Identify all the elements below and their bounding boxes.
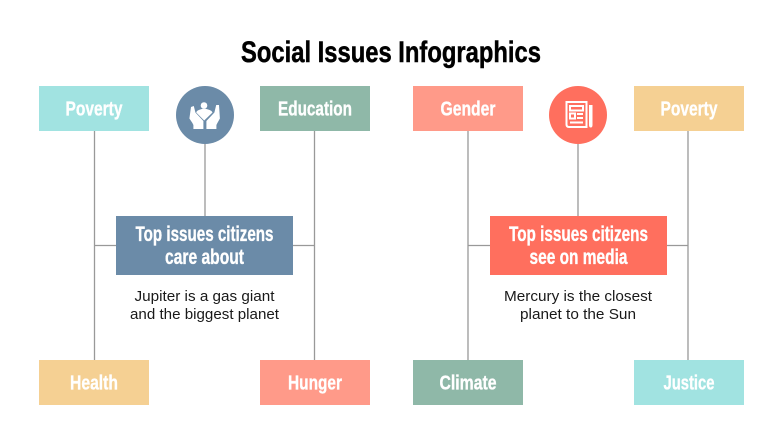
panel: citizens care about (39, 86, 370, 405)
icon: hands holding person (176, 86, 234, 144)
box: Education (260, 86, 370, 131)
description text: and the biggest planet (130, 306, 280, 323)
description text (504, 288, 653, 323)
description text (130, 288, 280, 323)
box: Health: Health (70, 372, 118, 394)
box: Justice (634, 360, 744, 405)
box: Education: Education (278, 98, 352, 120)
callout heading (116, 216, 293, 275)
callout heading: see on media (530, 246, 628, 269)
box: Climate: Climate (440, 372, 496, 394)
box: Poverty (39, 86, 149, 131)
callout heading: Top issues citizens (509, 223, 648, 246)
box: Hunger: Hunger (288, 372, 342, 394)
title: Social Issues Infographics (241, 36, 541, 69)
box: Hunger (260, 360, 370, 405)
box: Gender: Gender (440, 98, 496, 120)
icon: newspaper (549, 86, 607, 144)
description text: Jupiter is a gas giant (134, 288, 275, 305)
box: Health (39, 360, 149, 405)
box: Climate (413, 360, 523, 405)
box: Gender (413, 86, 523, 131)
panel: citizens see on media (413, 86, 744, 405)
callout heading (490, 216, 667, 275)
box: Justice: Justice (664, 372, 714, 394)
callout heading: care about (165, 246, 244, 269)
description text: planet to the Sun (520, 306, 636, 323)
callout heading: Top issues citizens (136, 223, 274, 246)
box: Poverty: Poverty (660, 98, 718, 120)
box: Poverty: Poverty (66, 98, 123, 120)
box: Poverty (634, 86, 744, 131)
description text: Mercury is the closest (504, 288, 653, 305)
